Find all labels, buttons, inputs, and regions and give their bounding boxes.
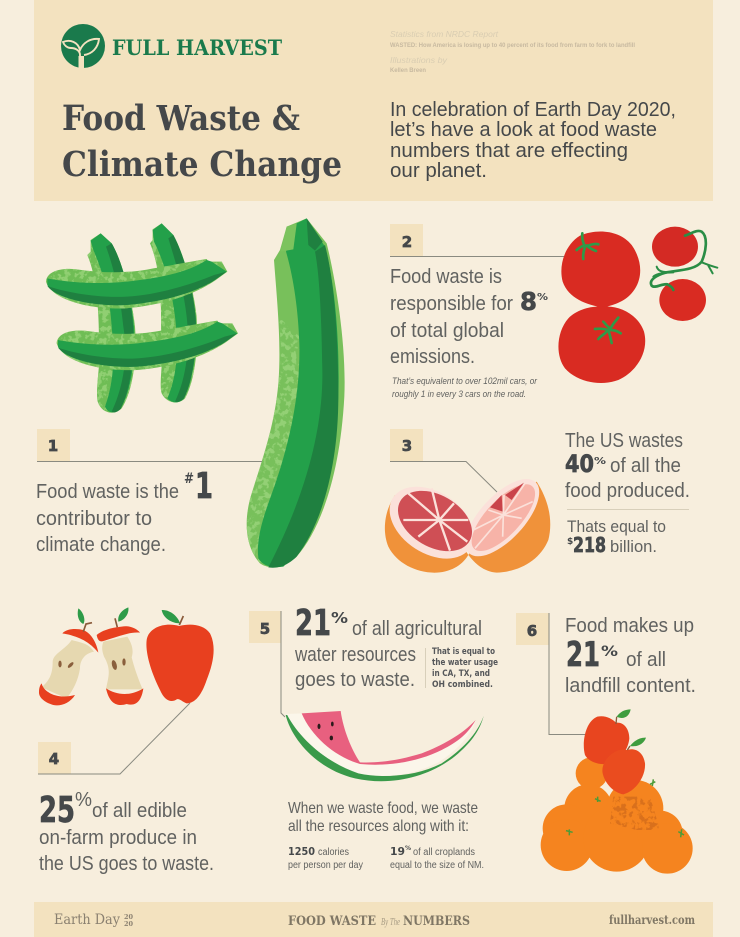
panel: header xyxy=(34,0,713,201)
illustration: apples xyxy=(39,607,214,705)
text: wasted resources xyxy=(288,800,478,835)
text: emissions: % xyxy=(537,292,548,303)
credits: Illustrations by xyxy=(390,56,448,65)
note: state water usage: the water usage xyxy=(432,658,498,668)
footer: Food Waste by the Numbers: NUMBERS xyxy=(403,914,470,929)
text: contributor: Food waste is the xyxy=(36,481,179,503)
footer: Food Waste by the Numbers: FOOD WASTE xyxy=(288,914,376,929)
text: 218 billion xyxy=(567,517,666,557)
section 6 xyxy=(516,613,696,874)
text: edible produce xyxy=(39,789,214,875)
illustration: grapefruit xyxy=(376,467,552,573)
intro text: numbers that are effecting xyxy=(390,140,628,162)
note: state water usage: in CA, TX, and xyxy=(432,669,490,679)
number badge 1 xyxy=(37,429,70,461)
note: state water usage: OH combined. xyxy=(432,680,493,690)
number badge 3: 3 xyxy=(402,437,412,455)
number badge 6 xyxy=(516,613,549,645)
text: contributor: contributor to xyxy=(36,508,152,530)
title xyxy=(62,98,342,185)
intro text: In celebration of Earth Day 2020, xyxy=(390,99,676,121)
text: US wastes: The US wastes xyxy=(565,430,683,452)
footer: Earth Day: 20 xyxy=(124,913,134,921)
text: edible produce: 25 xyxy=(39,790,75,831)
text: water resources: of all agricultural xyxy=(352,618,482,640)
zucchini: bottom horizontal xyxy=(57,321,238,370)
text: water resources: % xyxy=(331,609,348,627)
credits: Kellen Breen xyxy=(390,68,426,74)
number badge 5: 5 xyxy=(260,620,270,638)
text: landfill content: Food makes up xyxy=(565,615,694,637)
text: emissions: of total global xyxy=(390,320,504,342)
text: landfill content: % xyxy=(601,644,618,660)
stat: croplands: 19 xyxy=(390,845,405,858)
text: emissions: responsible for xyxy=(390,293,513,315)
credits: WASTED: How America is losing up to 40 percent of its food from farm to fork to landfill xyxy=(390,43,635,49)
text: US wastes: % xyxy=(594,456,606,467)
text: 218 billion: Thats equal to xyxy=(567,517,666,536)
text: contributor: climate change. xyxy=(36,534,166,556)
footer: Earth Day: Earth Day xyxy=(54,912,120,928)
text: edible produce: % xyxy=(75,789,92,811)
text: 218 billion: $ xyxy=(567,537,573,547)
number badge 2 xyxy=(390,224,423,256)
stat: croplands xyxy=(390,845,484,871)
illustration: watermelon rind xyxy=(286,711,484,781)
stat: calories xyxy=(288,845,363,871)
text: water resources: goes to waste. xyxy=(295,669,415,691)
number badge 3 xyxy=(390,429,423,461)
note: cars xyxy=(392,376,538,399)
text: US wastes: food produced. xyxy=(565,480,690,502)
intro text: our planet. xyxy=(390,160,487,182)
credits xyxy=(390,30,635,74)
text: landfill content: landfill content. xyxy=(565,675,696,697)
text: emissions: 8 xyxy=(520,287,537,316)
text: 218 billion: billion. xyxy=(610,537,657,556)
section 3 xyxy=(376,429,690,573)
text: edible produce: of all edible xyxy=(92,800,187,822)
logo: Full Harvest: FULL HARVEST xyxy=(112,35,282,60)
text: wasted resources: When we waste food, we waste xyxy=(288,800,478,817)
footer: Food Waste by the Numbers xyxy=(288,914,470,929)
text: edible produce: the US goes to waste. xyxy=(39,853,214,875)
text: contributor: # xyxy=(184,471,194,487)
footer: Food Waste by the Numbers: By The xyxy=(381,917,400,928)
text: emissions: Food waste is xyxy=(390,266,502,288)
footer: website: fullharvest.com xyxy=(609,913,695,927)
stat: calories: calories xyxy=(318,847,349,858)
stat: croplands: of all croplands xyxy=(413,847,475,858)
note: cars: That’s equivalent to over 102mil cars, or xyxy=(392,376,538,386)
number badge 6: 6 xyxy=(527,622,537,640)
zucchini: left vertical xyxy=(87,233,136,413)
text: contributor: 1 xyxy=(195,466,213,507)
panel: footer xyxy=(34,902,713,937)
stat: croplands: % xyxy=(405,845,411,852)
zucchini: right vertical xyxy=(150,223,197,402)
stat: croplands: equal to the size of NM. xyxy=(390,860,484,871)
note: state water usage xyxy=(432,647,498,690)
section 5 xyxy=(249,603,498,871)
text: wasted resources: all the resources along with it: xyxy=(288,818,469,835)
illustration: zucchini hash sign and number one xyxy=(46,218,345,568)
note: state water usage: That is equal to xyxy=(432,647,495,657)
footer: Earth Day: 20 xyxy=(124,920,134,928)
text: landfill content: 21 xyxy=(566,635,600,675)
text: edible produce: on-farm produce in xyxy=(39,827,197,849)
section 1 xyxy=(36,429,262,556)
number badge 4 xyxy=(38,742,71,774)
title: Food Waste & xyxy=(62,98,300,139)
number badge 1: 1 xyxy=(48,437,58,455)
text: emissions xyxy=(390,266,548,368)
zucchini: number one xyxy=(247,218,345,568)
credits: Statistics from NRDC Report xyxy=(390,30,499,39)
section 4 xyxy=(38,607,214,875)
stat: calories: 1250 xyxy=(288,845,315,858)
illustration: tomatoes xyxy=(558,227,717,383)
section 2 xyxy=(390,224,717,399)
text: landfill content xyxy=(565,615,696,697)
title: Climate Change xyxy=(62,144,342,185)
number badge 5 xyxy=(249,611,281,643)
text: US wastes: of all the xyxy=(610,455,681,477)
zucchini: top horizontal xyxy=(46,259,227,309)
text: landfill content: of all xyxy=(626,649,666,671)
text: 218 billion: 218 xyxy=(573,533,606,557)
text: water resources xyxy=(294,603,482,691)
intro text: let’s have a look at food waste xyxy=(390,119,657,141)
stat: calories: per person per day xyxy=(288,860,363,871)
note: cars: roughly 1 in every 3 cars on the road. xyxy=(392,389,526,399)
text: US wastes xyxy=(565,430,690,502)
number badge 4: 4 xyxy=(49,750,59,768)
text: emissions: emissions. xyxy=(390,346,475,368)
number badge 2: 2 xyxy=(402,233,412,251)
illustration: pile of oranges and apples xyxy=(541,709,693,874)
intro text xyxy=(390,99,676,182)
text: water resources: 21 xyxy=(295,603,331,644)
text: US wastes: 40 xyxy=(565,450,594,478)
logo: Full Harvest xyxy=(61,24,282,68)
text: contributor xyxy=(36,466,213,556)
text: water resources: water resources xyxy=(294,644,416,666)
